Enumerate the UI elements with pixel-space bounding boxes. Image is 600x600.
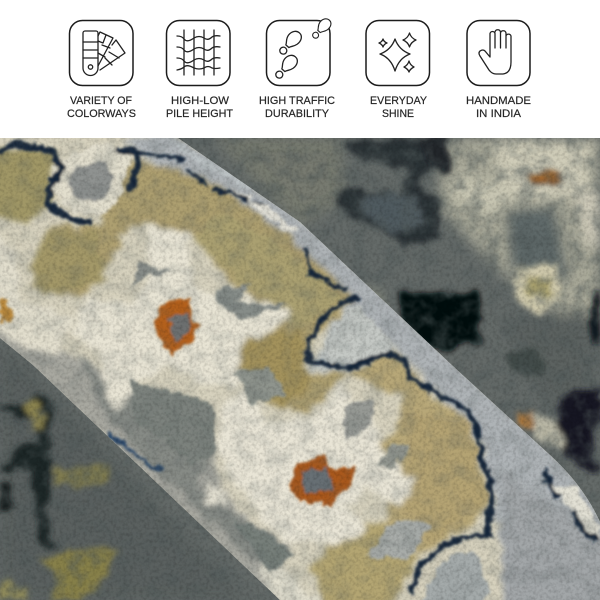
caption: high-low pile height bbox=[166, 95, 233, 120]
icon panel: high traffic durability bbox=[266, 16, 333, 86]
background rug surface bbox=[0, 138, 600, 600]
icon panel: high-low pile height bbox=[166, 20, 230, 86]
caption: high-low pile height: HIGH-LOW bbox=[171, 95, 230, 107]
photo: rolled rug close-up bbox=[0, 130, 600, 600]
grey rolled edge bbox=[123, 138, 600, 555]
caption: everyday shine: SHINE bbox=[382, 108, 414, 120]
cream flower one bbox=[75, 225, 295, 415]
rolled rug band bbox=[0, 130, 600, 600]
icon: hand bbox=[479, 30, 511, 74]
caption: everyday shine: EVERYDAY bbox=[370, 95, 428, 107]
caption: variety of colorways bbox=[67, 95, 136, 120]
grey medallion upper left bbox=[50, 142, 130, 215]
orange flower centres bbox=[155, 296, 200, 356]
icon: footprints bbox=[272, 16, 333, 81]
grey medallion on the edge bbox=[325, 305, 395, 362]
caption: high traffic durability bbox=[259, 95, 335, 120]
icon panel: everyday shine bbox=[366, 20, 430, 86]
caption: high traffic durability: HIGH TRAFFIC bbox=[259, 95, 335, 107]
caption: handmade in india: HANDMADE bbox=[466, 95, 531, 107]
icon panel: handmade in india bbox=[467, 20, 530, 86]
grey lower edge band bbox=[0, 329, 284, 598]
icon: sparkles bbox=[379, 33, 416, 72]
olive and tan fields bbox=[0, 150, 55, 225]
caption: handmade in india: IN INDIA bbox=[476, 108, 522, 120]
icon: pile weave bbox=[177, 30, 220, 75]
navy outlines bbox=[0, 145, 595, 590]
caption: high traffic durability: DURABILITY bbox=[265, 108, 330, 120]
caption: variety of colorways: COLORWAYS bbox=[67, 108, 136, 120]
cream flower two bbox=[215, 385, 415, 545]
icon panel: variety of colorways bbox=[70, 20, 133, 86]
caption: high-low pile height: PILE HEIGHT bbox=[166, 108, 233, 120]
caption: handmade in india bbox=[466, 95, 531, 120]
caption: everyday shine bbox=[370, 95, 428, 120]
grey accents bbox=[215, 285, 290, 320]
icon: colour swatch fan bbox=[83, 31, 125, 76]
caption: variety of colorways: VARIETY OF bbox=[70, 95, 132, 107]
